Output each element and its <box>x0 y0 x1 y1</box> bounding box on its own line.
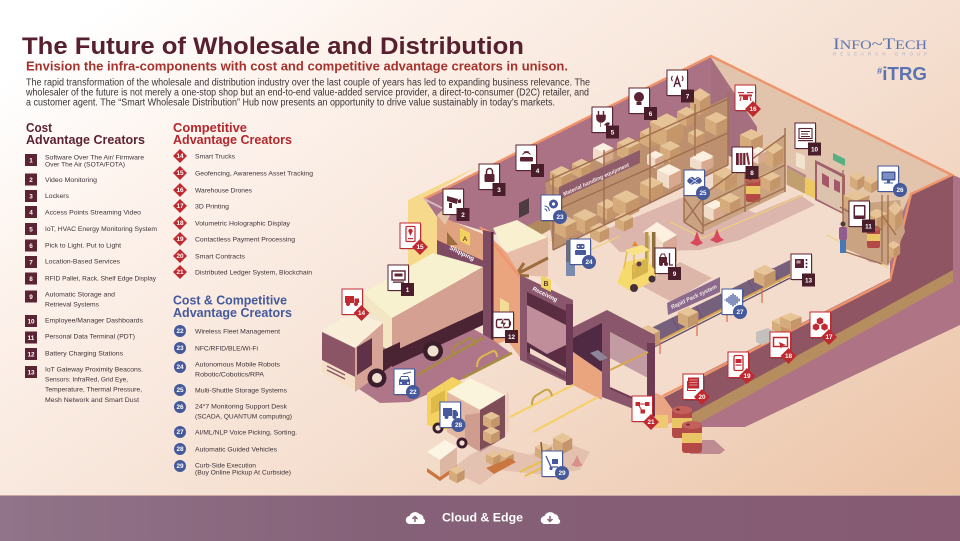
icon: 20 smart contracts: 20 <box>698 394 706 401</box>
item 28: 28 <box>176 446 184 453</box>
icon: 14 smart trucks <box>342 289 370 321</box>
icon: 18 holographic display: 18 <box>785 353 792 360</box>
item 14: Smart Trucks <box>195 153 236 160</box>
icon: 13 iot gateway <box>791 254 815 286</box>
item 13: Mesh Network and Smart Dust <box>45 397 139 404</box>
shipping bay ground and lane markings <box>356 310 598 432</box>
icon: 6 pick to light bulb <box>629 88 657 120</box>
item 9: 9 <box>29 294 33 301</box>
person operating robot <box>566 240 575 276</box>
icon: 24 mobile robots <box>570 239 596 269</box>
item 15: Geofencing, Awareness Asset Tracking <box>195 170 313 177</box>
item 13: Sensors: InfraRed, Grid Eye, <box>45 376 128 384</box>
icon: 7 location signal: 7 <box>686 94 690 100</box>
delivery van <box>427 377 509 452</box>
item 19: 19 <box>176 236 184 243</box>
sign: B: B <box>543 281 549 288</box>
shipping dock <box>437 208 494 350</box>
item 21: Distributed Ledger System, Blockchain <box>195 269 312 276</box>
oil barrels <box>672 406 725 454</box>
back left wall <box>424 56 711 242</box>
item 28: Automatic Guided Vehicles <box>195 446 278 453</box>
icon: 15 geofencing: 15 <box>416 244 424 251</box>
icon: 4 access points: 4 <box>536 168 540 175</box>
icon: 26 monitoring desk <box>878 166 907 197</box>
heading: cost and competitive: Cost & Competitive <box>173 292 287 308</box>
orange wall top edge <box>424 56 952 396</box>
item 19 <box>173 232 295 246</box>
icon: 11 data terminal <box>849 201 875 232</box>
item 3: 3 <box>29 194 33 200</box>
back right wall <box>711 56 952 240</box>
item 26 <box>174 401 292 420</box>
intro paragraph: wholesaler of the future is not merely a one-stop shop but an end-to-end value-added service provider, a direct-to-consumer (D2C) retailer, and <box>25 88 589 98</box>
icon: 24 mobile robots: 24 <box>585 259 593 266</box>
item 15: 15 <box>176 170 184 177</box>
item 6: Pick to Light. Put to Light <box>45 242 121 249</box>
heading: competitive: Advantage Creators <box>173 132 292 147</box>
icon: 21 distributed ledger: 21 <box>647 419 655 426</box>
item 16 <box>173 183 253 197</box>
label: receiving: Receiving <box>531 286 558 304</box>
item 4 <box>25 206 141 218</box>
conveyor belt <box>636 260 790 354</box>
icon: 23 nfc rfid <box>541 195 567 224</box>
icon: 25 multi-shuttle <box>684 170 710 200</box>
icon: 1 software over the air <box>388 265 414 296</box>
icon: 18 holographic display <box>770 332 796 364</box>
item 26: 24*7 Monitoring Support Desk <box>195 403 288 410</box>
item 5: 5 <box>29 226 33 234</box>
icon: 29 curb-side: 29 <box>558 470 566 477</box>
item 25 <box>174 384 288 396</box>
icon: 2 video monitoring <box>443 189 470 221</box>
item 2: Video Monitoring <box>45 177 97 184</box>
item 23 <box>174 342 258 354</box>
item 14: 14 <box>176 153 184 160</box>
item 29: 29 <box>176 463 184 470</box>
icon: 3 lockers: 3 <box>497 187 501 194</box>
sign: rapid pack system <box>667 277 720 315</box>
subtitle: Envision the infra-components with cost and competitive advantage creators in unison. <box>26 58 568 74</box>
forklift <box>617 222 677 292</box>
icon: 23 nfc rfid: 23 <box>556 214 564 221</box>
pallets and pallet jack <box>427 433 590 485</box>
item 10 <box>25 315 144 327</box>
item 19: Contactless Payment Processing <box>195 236 295 243</box>
icon: 17 3d printing <box>810 312 837 345</box>
label: cloud and edge: Cloud & Edge <box>442 512 523 524</box>
item 10: 10 <box>27 318 35 326</box>
right storage rack with worker <box>839 170 905 266</box>
footer band: cloud and edge <box>0 495 960 541</box>
icon: 27 voice picking: 27 <box>736 309 744 316</box>
item 23: 23 <box>176 345 184 352</box>
item 7: Location-Based Services <box>45 258 121 266</box>
icon: 15 geofencing <box>400 223 428 255</box>
item 2 <box>25 174 97 186</box>
item 1: Software Over The Air/ Firmware <box>45 154 144 162</box>
item 13: 13 <box>27 370 35 376</box>
icon: 20 smart contracts <box>683 374 710 405</box>
sign: material handling: Material handling equipment <box>562 162 631 198</box>
cab <box>322 313 383 348</box>
icon: 25 multi-shuttle: 25 <box>699 190 707 197</box>
icon: 11 data terminal: 11 <box>865 224 872 230</box>
icon: 26 monitoring desk: 26 <box>896 187 904 194</box>
legend: competitive advantage creators <box>173 120 313 279</box>
item 18: 18 <box>176 220 184 227</box>
item 10: Employee/Manager Dashboards <box>45 318 144 324</box>
heading: cost: Advantage Creators <box>26 132 145 147</box>
item 9 <box>25 290 115 308</box>
legend: cost and competitive advantage creators <box>173 292 297 476</box>
icon: 12 battery charging: 12 <box>508 334 515 341</box>
icon: 8 rfid shelf: 8 <box>750 170 754 177</box>
item 16: 16 <box>176 187 184 194</box>
legend: cost advantage creators <box>25 120 157 404</box>
icon: 2 video monitoring: 2 <box>461 212 465 219</box>
item 20 <box>173 249 246 263</box>
logo: Info-Tech Research Group: INFO ~T ECH <box>833 36 927 53</box>
service door on back wall <box>519 198 529 218</box>
item 27 <box>174 426 297 438</box>
item 26: (SCADA, QUANTUM computing) <box>195 414 292 420</box>
title: The Future of Wholesale and Distribution <box>22 33 524 60</box>
item 17 <box>173 199 229 213</box>
icon: 13 iot gateway: 13 <box>805 278 812 284</box>
item 7 <box>25 256 121 268</box>
item 12: Battery Charging Stations <box>45 350 124 357</box>
heading: competitive <box>173 120 292 147</box>
item 28 <box>174 443 278 455</box>
icon: 10 dashboards <box>795 123 821 156</box>
boxes and crate by front wall <box>756 313 802 345</box>
item 14 <box>173 149 236 163</box>
icon: 9 forklift <box>655 248 681 280</box>
icon: 28 guided vehicles <box>440 402 466 432</box>
semi truck <box>322 253 483 392</box>
item 3 <box>25 190 70 202</box>
item 8: RFID Pallet, Rack, Shelf Edge Display <box>45 275 157 282</box>
icon: 17 3d printing: 17 <box>825 334 833 341</box>
item 20: Smart Contracts <box>195 253 246 260</box>
item 2: 2 <box>29 177 33 184</box>
icon: 16 warehouse drones: 16 <box>749 106 757 113</box>
icon: cloud download <box>541 512 560 524</box>
item 29: (Buy Online Pickup At Curbside) <box>195 470 291 476</box>
label: shipping: Shipping <box>448 245 475 263</box>
shipping dock: A <box>463 236 468 243</box>
item 9: Automatic Storage and <box>45 292 115 298</box>
panel: isometric smart warehouse illustration <box>322 56 960 485</box>
item 21: 21 <box>176 269 184 276</box>
item 1: Over The Air (SOTA/FOTA) <box>45 162 125 168</box>
item 26: 26 <box>176 404 184 411</box>
item 23: NFC/RFID/BLE/Wi-Fi <box>195 345 258 352</box>
wheels <box>383 342 400 372</box>
item 13 <box>25 366 143 404</box>
sign: B <box>541 275 551 292</box>
item 27: 27 <box>176 429 184 436</box>
item 5 <box>25 223 157 235</box>
item 22: Wireless Fleet Management <box>195 328 280 335</box>
logo: Info-Tech Research Group: iTRG <box>882 64 927 84</box>
item 13: Temperature, Thermal Pressure, <box>45 386 142 394</box>
item 18: Volumetric Holographic Display <box>195 220 291 227</box>
logo: Info-Tech Research Group: RESEARCH GROUP <box>833 52 927 56</box>
item 24: Robotic/Cobotics/RPA <box>195 372 264 378</box>
icon: 22 wireless fleet <box>394 369 420 399</box>
heading: competitive: Competitive <box>173 120 247 135</box>
item 3: Lockers <box>45 193 70 200</box>
item 11: 11 <box>28 335 35 342</box>
heading: cost and competitive: Advantage Creators <box>173 305 292 320</box>
item 17: 3D Printing <box>195 203 229 210</box>
icon: 19 contactless payment <box>728 352 755 384</box>
item 24 <box>174 361 281 378</box>
item 13: IoT Gateway Proximity Beacons. <box>45 366 143 373</box>
item 18 <box>173 216 291 230</box>
icon: 1 software over the air: 1 <box>406 287 410 294</box>
heading: cost: Cost <box>26 120 53 135</box>
item 24: 24 <box>176 364 184 371</box>
item 24: Autonomous Mobile Robots <box>195 361 281 368</box>
item 6 <box>25 240 121 252</box>
floor lines and shadows <box>550 190 890 302</box>
icon: 29 curb-side <box>542 451 569 480</box>
intro paragraph <box>25 78 590 108</box>
icon: 22 wireless fleet: 22 <box>409 389 417 396</box>
item 11 <box>25 332 135 344</box>
third dock gate <box>573 310 655 417</box>
icon: 16 warehouse drones <box>735 85 761 117</box>
item 25: Multi-Shuttle Storage Systems <box>195 387 288 394</box>
item 5: IoT, HVAC Energy Monitoring System <box>45 226 157 233</box>
icon: 9 forklift: 9 <box>673 271 677 278</box>
icon: 4 access points <box>516 145 544 177</box>
trailer <box>392 310 483 367</box>
worker with terminal <box>839 222 847 253</box>
icon: 28 guided vehicles: 28 <box>455 422 462 429</box>
icon: 14 smart trucks: 14 <box>358 310 365 317</box>
icon: 3 lockers <box>479 164 506 196</box>
item 1 <box>25 154 144 168</box>
icon: 10 dashboards: 10 <box>811 146 818 154</box>
item 1: 1 <box>29 158 33 164</box>
icon: 8 rfid shelf <box>732 147 758 179</box>
item 27: AI/ML/NLP Voice Picking, Sorting. <box>195 429 297 436</box>
material handling rack <box>545 88 728 250</box>
icon: 21 distributed ledger <box>632 396 659 430</box>
item 21 <box>173 265 312 279</box>
icon: 12 battery charging <box>493 312 518 343</box>
item 4: Access Points Streaming Video <box>45 209 141 216</box>
icon: 7 location signal <box>667 70 694 102</box>
yellow outer wall corner <box>408 167 477 278</box>
icon cards placed on the illustration <box>342 70 907 480</box>
item 17: 17 <box>176 203 184 210</box>
receiving dock <box>480 220 573 385</box>
item 8 <box>25 272 157 284</box>
sign: rapid pack system: Rapid Pack system <box>670 284 718 311</box>
item 15 <box>173 166 313 180</box>
icon: 6 pick to light bulb: 6 <box>649 111 653 118</box>
item 8: 8 <box>29 276 33 283</box>
item 4: 4 <box>29 210 33 216</box>
warehouse floor <box>523 147 890 394</box>
front storage rack <box>684 128 785 234</box>
sign: material handling <box>559 150 640 200</box>
item 20: 20 <box>176 253 184 260</box>
icon: cloud upload <box>406 512 425 524</box>
item 29 <box>174 460 291 476</box>
logo: Info-Tech Research Group: # <box>877 66 882 76</box>
heading: cost and competitive <box>173 292 292 320</box>
double doors and exit sign <box>796 152 845 215</box>
icon: 5 energy plug: 5 <box>611 130 615 136</box>
item 22: 22 <box>176 328 184 335</box>
item 29: Curb-Side Execution <box>195 462 256 469</box>
item 12: 12 <box>27 352 35 358</box>
item 25: 25 <box>176 387 184 394</box>
intro paragraph: a customer agent. The “Smart Wholesale Distribution” Hub now presents an opportunity to drive value sustainably in today’s markets. <box>26 98 555 108</box>
icon: 5 energy plug <box>592 107 619 138</box>
item 9: Retrieval Systems <box>45 302 100 308</box>
item 16: Warehouse Drones <box>195 187 253 194</box>
item 6: 6 <box>29 243 33 250</box>
icon: 19 contactless payment: 19 <box>743 373 751 380</box>
item 7: 7 <box>29 260 33 266</box>
heading: cost <box>26 120 145 147</box>
floor cones <box>571 229 724 467</box>
item 11: Personal Data Terminal (PDT) <box>45 334 135 340</box>
logo: Info-Tech Research Group <box>833 36 927 84</box>
item 12 <box>25 348 124 360</box>
item 22 <box>174 325 280 337</box>
intro paragraph: The rapid transformation of the wholesale and distribution industry over the last couple of years has led to expanding business relevance. The <box>26 78 590 88</box>
icon: 27 voice picking <box>722 289 747 319</box>
